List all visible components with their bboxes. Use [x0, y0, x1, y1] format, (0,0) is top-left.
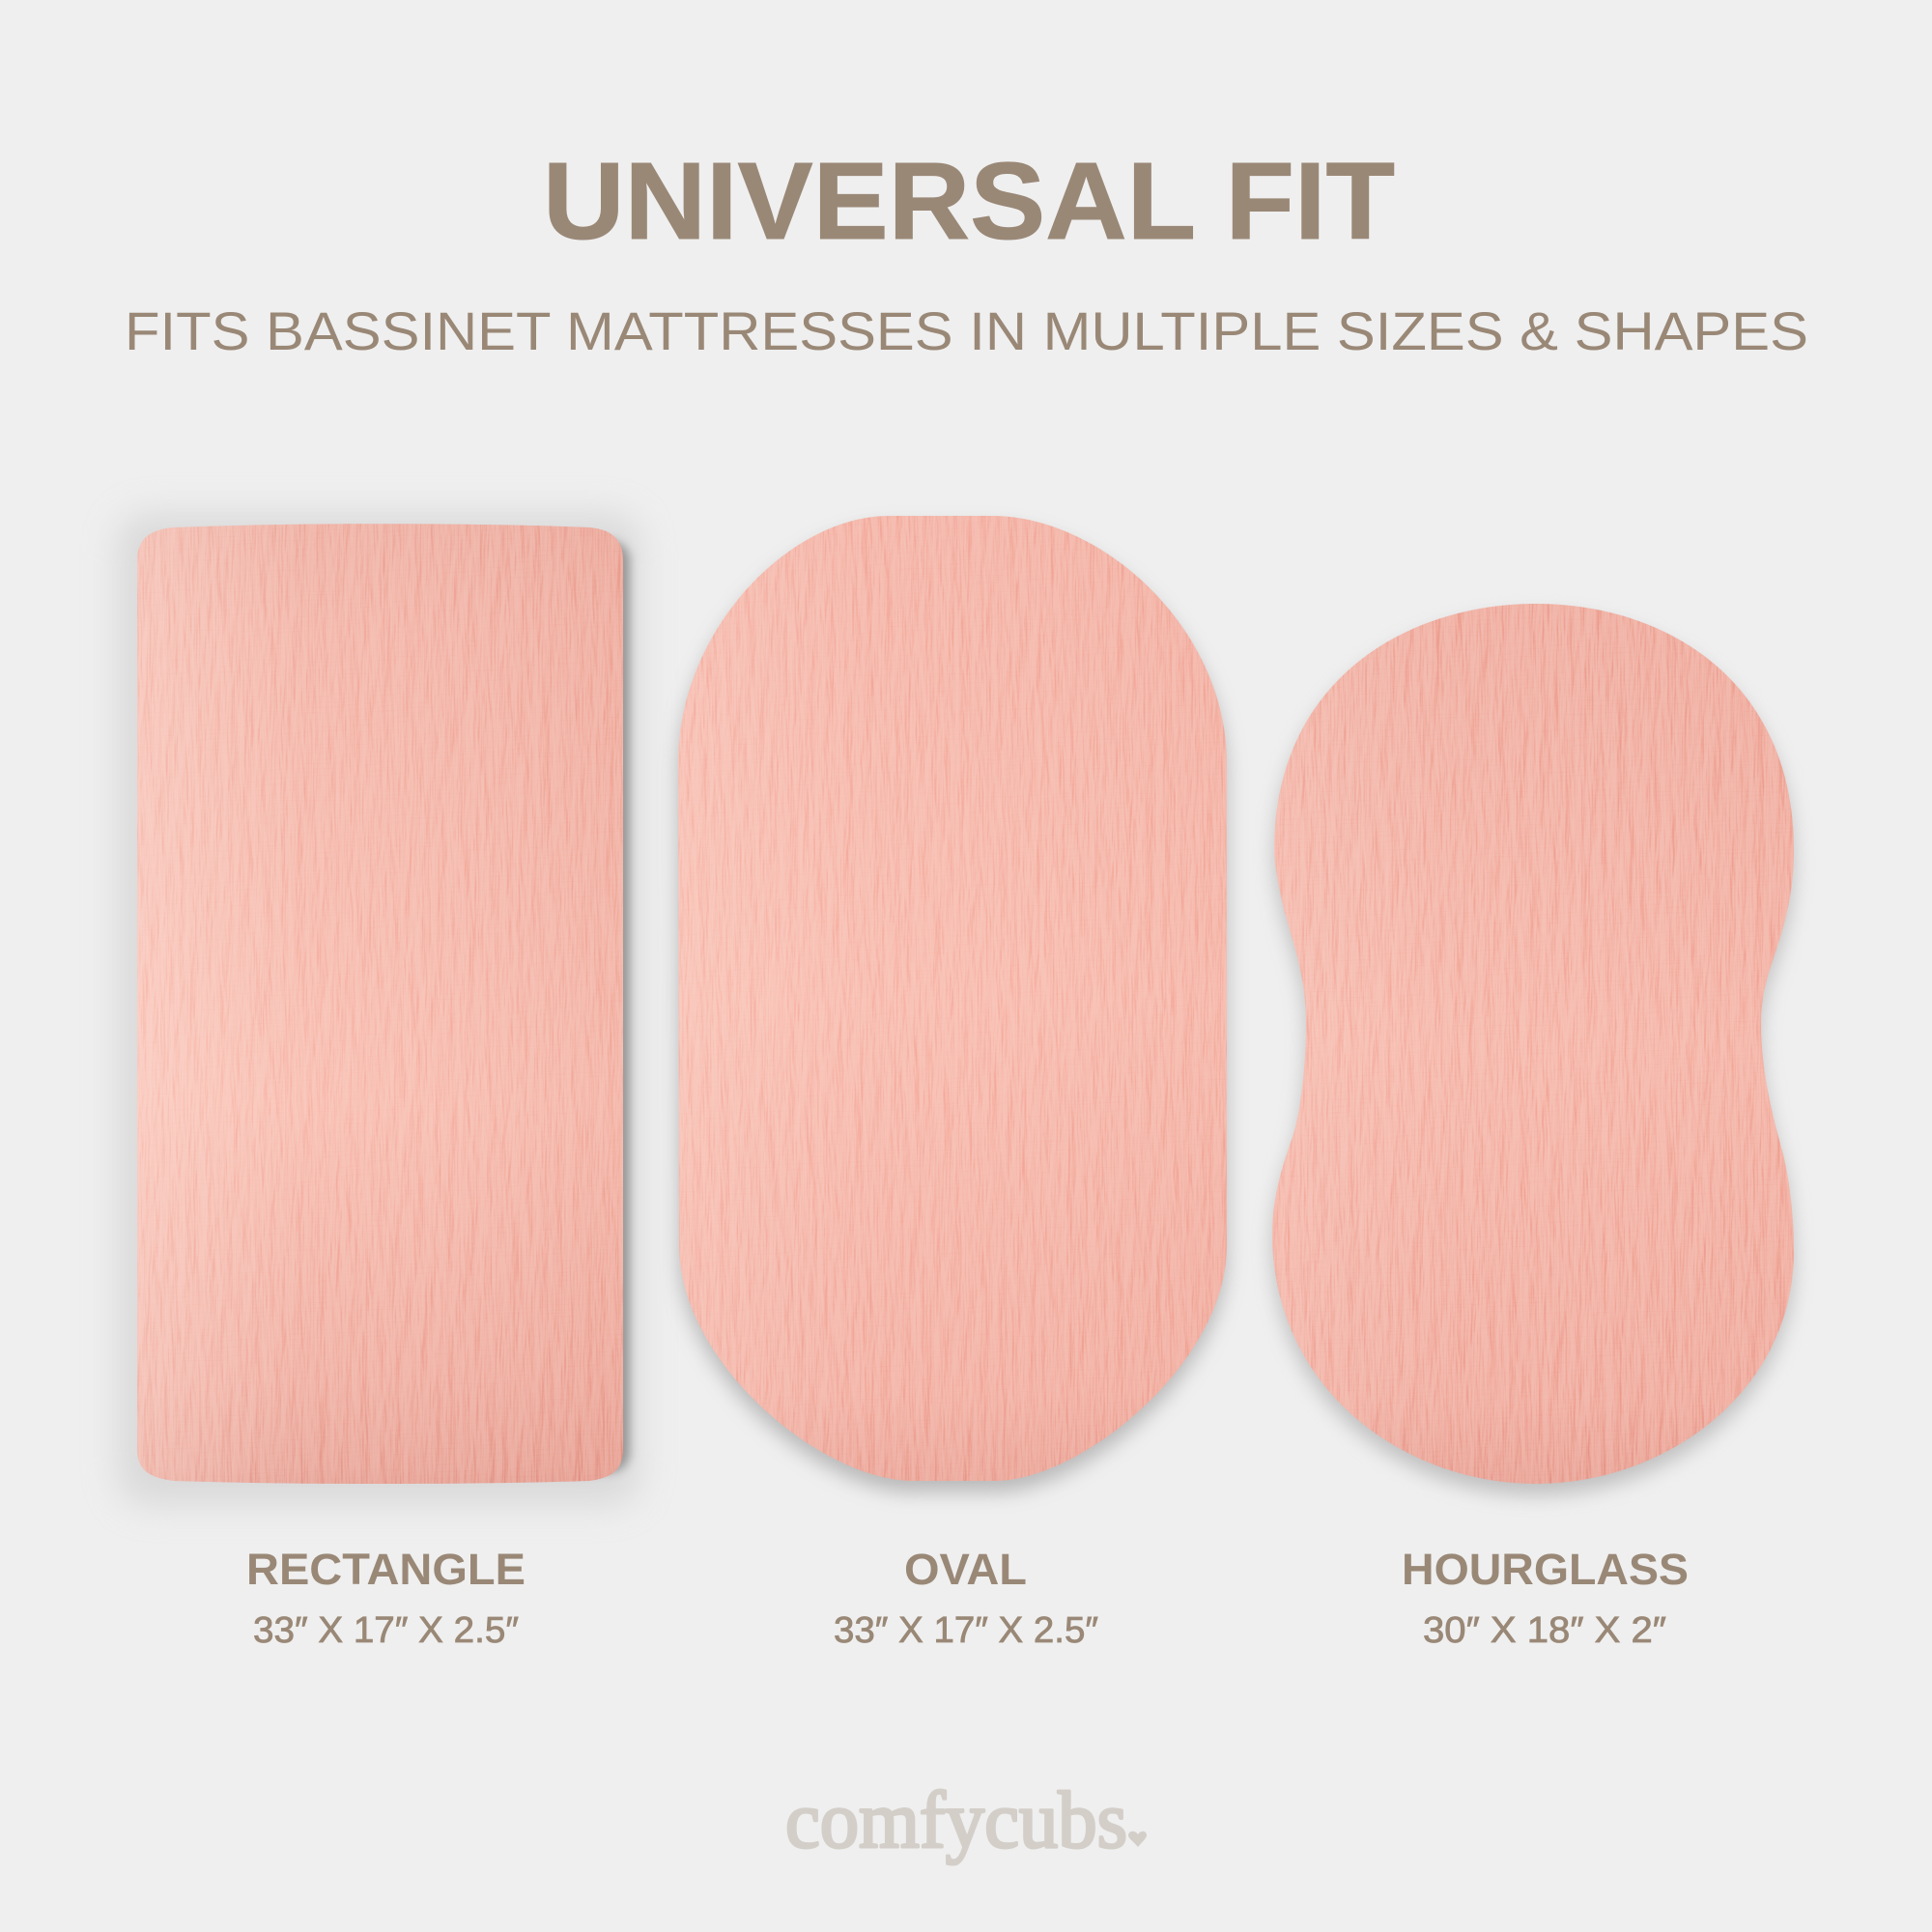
- label: rectangle: 33″ X 17″ X 2.5″: [253, 1610, 519, 1651]
- oval mattress shadow: [678, 527, 1227, 1492]
- rectangle mattress fabric: [126, 512, 638, 1497]
- icon: heart: [1128, 1832, 1147, 1847]
- label: rectangle: [246, 1545, 526, 1651]
- logo: comfycubs: comfycubs: [785, 1776, 1127, 1865]
- hourglass mattress shadow: [1272, 615, 1794, 1495]
- rectangle mattress shadow: [118, 514, 639, 1505]
- hourglass mattress fabric: [1261, 594, 1806, 1492]
- panel: oval mattress: [671, 507, 1236, 1492]
- label: rectangle: RECTANGLE: [246, 1545, 526, 1594]
- oval mattress fabric: [671, 507, 1236, 1492]
- title: UNIVERSAL FIT: [543, 140, 1395, 262]
- label: hourglass: [1402, 1545, 1689, 1651]
- panel: rectangle mattress: [118, 512, 639, 1505]
- panel: hourglass mattress: [1261, 594, 1806, 1495]
- subtitle: FITS BASSINET MATTRESSES IN MULTIPLE SIZES & SHAPES: [125, 300, 1808, 361]
- label: oval: [834, 1545, 1098, 1651]
- label: hourglass: 30″ X 18″ X 2″: [1423, 1610, 1666, 1651]
- label: oval: 33″ X 17″ X 2.5″: [834, 1610, 1098, 1651]
- label: oval: OVAL: [904, 1545, 1027, 1594]
- label: hourglass: HOURGLASS: [1402, 1545, 1689, 1594]
